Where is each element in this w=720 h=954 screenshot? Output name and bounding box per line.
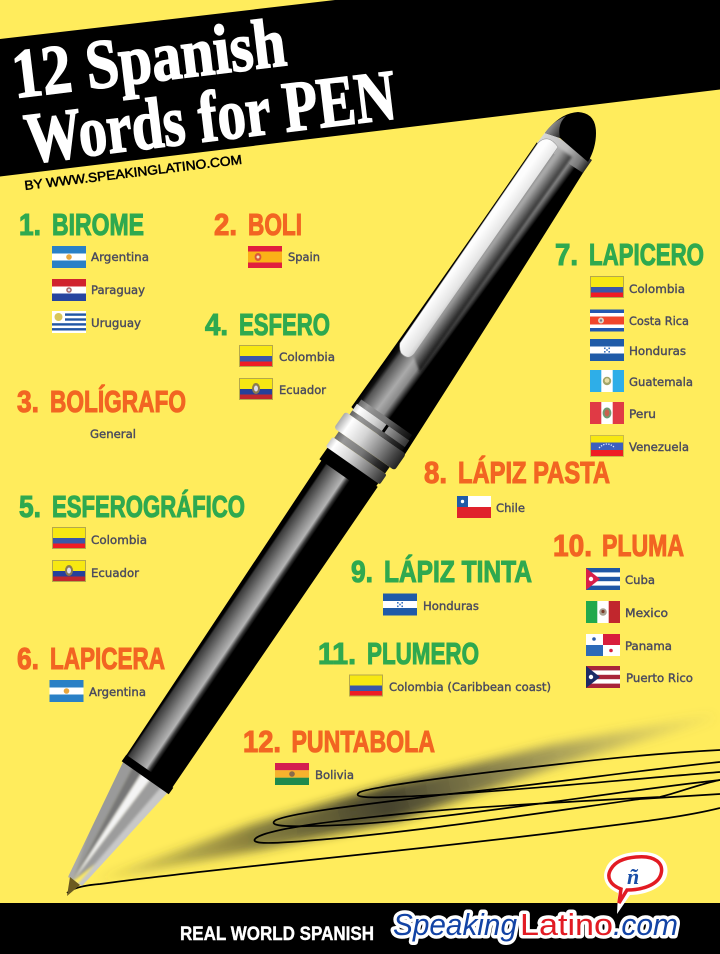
heading (318, 636, 479, 671)
flag: Mexico (586, 601, 620, 623)
heading: 3. (17, 384, 39, 419)
entry 10 PLUMA (553, 528, 693, 688)
label: Mexico (625, 606, 668, 620)
label: Colombia (279, 350, 335, 364)
flag: Honduras (590, 339, 624, 361)
label: Colombia (91, 533, 147, 547)
logo wordmark: .com (613, 907, 678, 942)
entry 3 BOLIGRAFO (17, 384, 186, 441)
flag: Colombia (349, 674, 383, 696)
heading: 10. (553, 528, 592, 563)
flag: Puerto Rico (586, 666, 620, 688)
flag: Honduras (383, 594, 417, 616)
label: Venezuela (629, 440, 689, 454)
entry 7 LAPICERO (555, 237, 704, 457)
pen (60, 112, 596, 896)
entry 8 LAPIZ PASTA (424, 455, 610, 518)
heading (214, 207, 302, 242)
entry 9 LAPIZ TINTA (351, 554, 532, 616)
heading (17, 384, 186, 419)
heading: PUNTABOLA (292, 724, 435, 759)
label: Argentina (89, 685, 146, 699)
title banner (0, 0, 720, 179)
title: 12 Spanish (8, 4, 290, 114)
entry 11 PLUMERO (318, 636, 551, 696)
logo wordmark: Latino (520, 907, 613, 942)
title: Words for PEN (20, 55, 400, 179)
label: Puerto Rico (626, 671, 693, 685)
lower barrel (125, 453, 377, 790)
flag: Cuba (586, 568, 620, 590)
heading: 5. (19, 489, 41, 524)
heading (19, 207, 144, 242)
logo speech bubble (604, 852, 668, 914)
flag: Costa Rica (590, 310, 624, 332)
pen clip (400, 139, 558, 357)
logo wordmark: Speaking (393, 907, 517, 942)
heading: 12. (243, 724, 281, 759)
footer bar (0, 852, 720, 954)
label: Costa Rica (629, 314, 689, 328)
heading (243, 724, 435, 759)
heading: 11. (318, 636, 356, 671)
cap dome (545, 112, 596, 162)
flag: Peru (590, 402, 624, 424)
heading: 6. (17, 641, 39, 676)
label: Colombia (Caribbean coast) (389, 680, 551, 694)
logo wordmark (393, 907, 678, 942)
flag: Guatemala (590, 370, 624, 392)
label: General (90, 427, 136, 441)
label: Guatemala (629, 375, 693, 389)
heading: 8. (424, 455, 447, 490)
flag: Bolivia (275, 763, 309, 785)
heading (17, 641, 165, 676)
flag: Paraguay (52, 279, 86, 301)
label: Paraguay (91, 283, 145, 297)
flag: Ecuador (239, 378, 273, 400)
heading: BOLÍGRAFO (50, 384, 186, 419)
tagline: REAL WORLD SPANISH (180, 924, 374, 945)
heading (351, 554, 532, 589)
byline: BY WWW.SPEAKINGLATINO.COM (24, 152, 243, 193)
flag: Colombia (590, 276, 624, 298)
label: Bolivia (315, 768, 354, 782)
flag: Venezuela (590, 435, 624, 457)
heading: 1. (19, 207, 41, 242)
heading: BOLI (248, 207, 302, 242)
heading: ESFERO (239, 307, 330, 342)
ink scribble (67, 750, 720, 893)
label: Peru (629, 407, 656, 421)
flag: Spain (248, 246, 282, 268)
flag: Panama (586, 634, 620, 656)
flag: Ecuador (52, 560, 86, 582)
entry 6 LAPICERA (17, 641, 165, 702)
heading (19, 489, 245, 524)
cap band (537, 130, 592, 173)
logo (393, 852, 678, 942)
heading: LAPICERA (50, 641, 165, 676)
title (8, 4, 400, 179)
label: Honduras (629, 344, 686, 358)
entry 12 PUNTABOLA (243, 724, 435, 785)
pen tip (67, 877, 80, 896)
label: Ecuador (279, 383, 326, 397)
flag: Argentina (52, 246, 86, 268)
label: Spain (288, 250, 320, 264)
flag: Argentina (50, 680, 84, 702)
heading (555, 237, 704, 272)
label: Cuba (625, 573, 655, 587)
flag: Colombia (239, 345, 273, 367)
heading: BIROME (52, 207, 144, 242)
heading (205, 307, 330, 342)
heading: 2. (214, 207, 237, 242)
upper barrel (352, 143, 583, 458)
logo speech bubble: ñ (627, 864, 639, 889)
entry 1 BIROME (19, 207, 149, 333)
label: Ecuador (91, 566, 139, 580)
label: Honduras (423, 599, 479, 613)
heading: ESFEROGRÁFICO (52, 489, 245, 524)
entry 2 BOLI (214, 207, 320, 268)
heading: 7. (555, 237, 578, 272)
entry 5 ESFEROGRAFICO (19, 489, 245, 582)
flag: Colombia (52, 527, 86, 549)
heading: LÁPIZ TINTA (384, 554, 532, 589)
label: Panama (625, 639, 672, 653)
heading (553, 528, 684, 563)
flag: Uruguay (52, 311, 86, 333)
clip shade (413, 147, 572, 372)
heading (424, 455, 610, 490)
pen shadow (96, 714, 715, 880)
heading: PLUMA (602, 528, 684, 563)
heading: 4. (205, 307, 228, 342)
label: Uruguay (91, 316, 141, 330)
flag: Chile (457, 496, 491, 518)
heading: 9. (351, 554, 373, 589)
ring assembly (314, 396, 417, 498)
pen nose cone (68, 762, 167, 886)
label: Chile (496, 501, 525, 515)
heading: PLUMERO (367, 636, 479, 671)
entry 4 ESFERO (205, 307, 335, 400)
label: Argentina (91, 250, 149, 264)
heading: LÁPIZ PASTA (458, 455, 610, 490)
label: Colombia (629, 282, 685, 296)
